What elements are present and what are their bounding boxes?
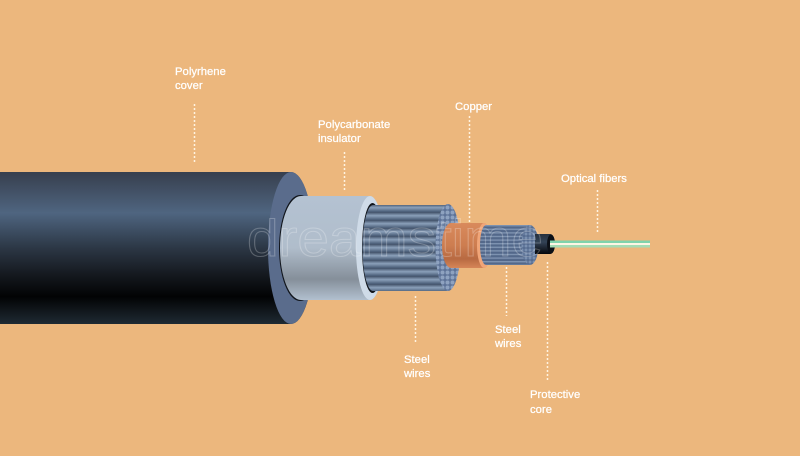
label: outer steel wires: Steel	[404, 354, 430, 366]
label: optical fibers	[561, 173, 627, 234]
label: polycarbonate insulator: Polycarbonate	[318, 119, 390, 131]
polyrhene cover	[0, 172, 321, 324]
cable illustration	[0, 172, 650, 324]
label: optical fibers: Optical fibers	[561, 173, 627, 185]
copper layer	[442, 223, 491, 268]
label: inner steel wires: wires	[494, 338, 522, 350]
label: outer steel wires	[403, 296, 431, 380]
label: polycarbonate insulator: insulator	[318, 133, 361, 145]
label: protective core	[530, 262, 580, 416]
label: polyrhene cover: Polyrhene	[175, 66, 226, 78]
protective core	[535, 234, 555, 254]
polycarbonate insulator	[280, 196, 384, 300]
outer steel wires	[363, 204, 460, 291]
label: protective core: Protective	[530, 389, 580, 401]
label: polyrhene cover	[175, 66, 226, 164]
label: inner steel wires: Steel	[495, 324, 521, 336]
label: inner steel wires	[494, 267, 522, 350]
label: protective core: core	[530, 404, 552, 416]
label: copper	[455, 101, 492, 222]
optical fibers	[550, 240, 650, 248]
label: polycarbonate insulator	[318, 119, 390, 192]
label: copper: Copper	[455, 101, 492, 113]
label: polyrhene cover: cover	[175, 80, 203, 92]
inner steel wires	[480, 225, 538, 265]
watermark: dreamstime	[247, 210, 543, 268]
label: outer steel wires: wires	[403, 368, 431, 380]
